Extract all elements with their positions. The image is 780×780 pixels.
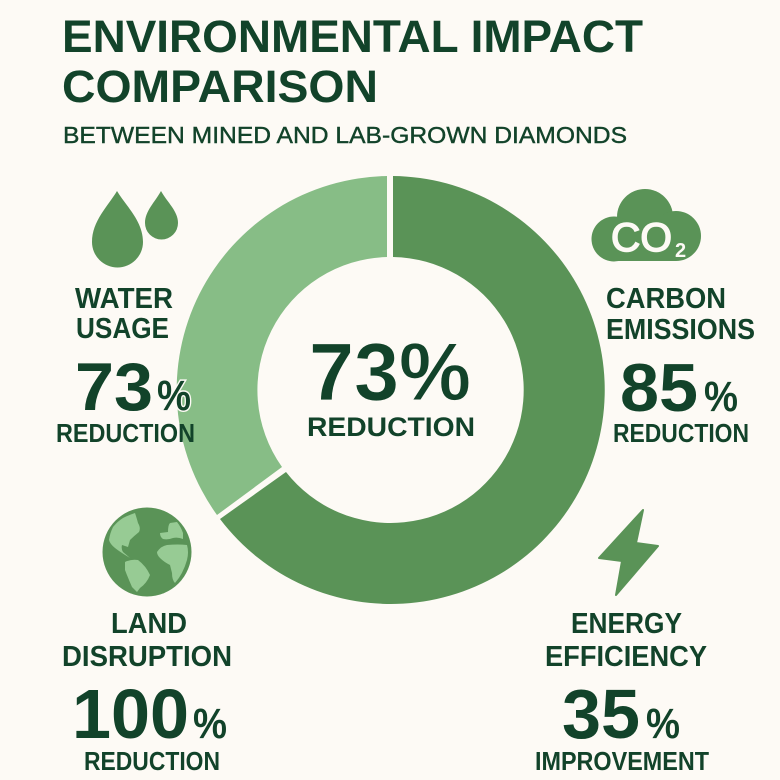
center value: 73%: [309, 327, 471, 418]
stat: energy efficiency: %: [646, 700, 680, 748]
title: ENVIRONMENTAL IMPACT: [62, 11, 643, 62]
icon: globe: [102, 508, 192, 596]
stat: water usage: [56, 283, 195, 448]
stat: land disruption: 100: [72, 675, 189, 753]
stat: energy efficiency: ENERGY: [571, 608, 682, 640]
title: COMPARISON: [62, 61, 378, 112]
stat: energy efficiency: [535, 608, 709, 776]
stat: carbon emissions: [606, 283, 755, 448]
stat: carbon emissions: 85: [620, 350, 698, 426]
stat: water usage: 73: [75, 349, 153, 425]
stat: carbon emissions: CARBON: [606, 283, 726, 315]
icon: CO2 cloud: [592, 189, 701, 262]
center value: REDUCTION: [307, 412, 475, 442]
title: [62, 11, 643, 112]
subtitle: BETWEEN MINED AND LAB-GROWN DIAMONDS: [63, 122, 627, 148]
stat: water usage: WATER: [75, 283, 173, 315]
stat: carbon emissions: REDUCTION: [613, 418, 749, 448]
stat: energy efficiency: 35: [562, 675, 640, 753]
donut chart: [177, 176, 605, 604]
donut segment: dark: [220, 176, 605, 604]
icon: CO2 cloud: CO: [611, 216, 672, 260]
stat: land disruption: LAND: [111, 608, 187, 640]
icon: lightning bolt: [599, 510, 658, 595]
stat: energy efficiency: EFFICIENCY: [545, 641, 707, 673]
icon: CO2 cloud: 2: [675, 240, 686, 262]
stat: energy efficiency: IMPROVEMENT: [535, 746, 709, 776]
stat: water usage: %: [157, 372, 191, 420]
stat: carbon emissions: EMISSIONS: [606, 314, 755, 346]
stat: water usage: REDUCTION: [56, 418, 195, 448]
stat: water usage: USAGE: [76, 313, 169, 345]
stat: land disruption: REDUCTION: [84, 746, 220, 776]
donut segment: light: [177, 176, 387, 515]
stat: carbon emissions: %: [704, 373, 738, 421]
stat: land disruption: [62, 608, 232, 776]
stat: land disruption: %: [193, 700, 227, 748]
stat: land disruption: DISRUPTION: [62, 641, 232, 673]
icon: water drops: [92, 191, 178, 268]
